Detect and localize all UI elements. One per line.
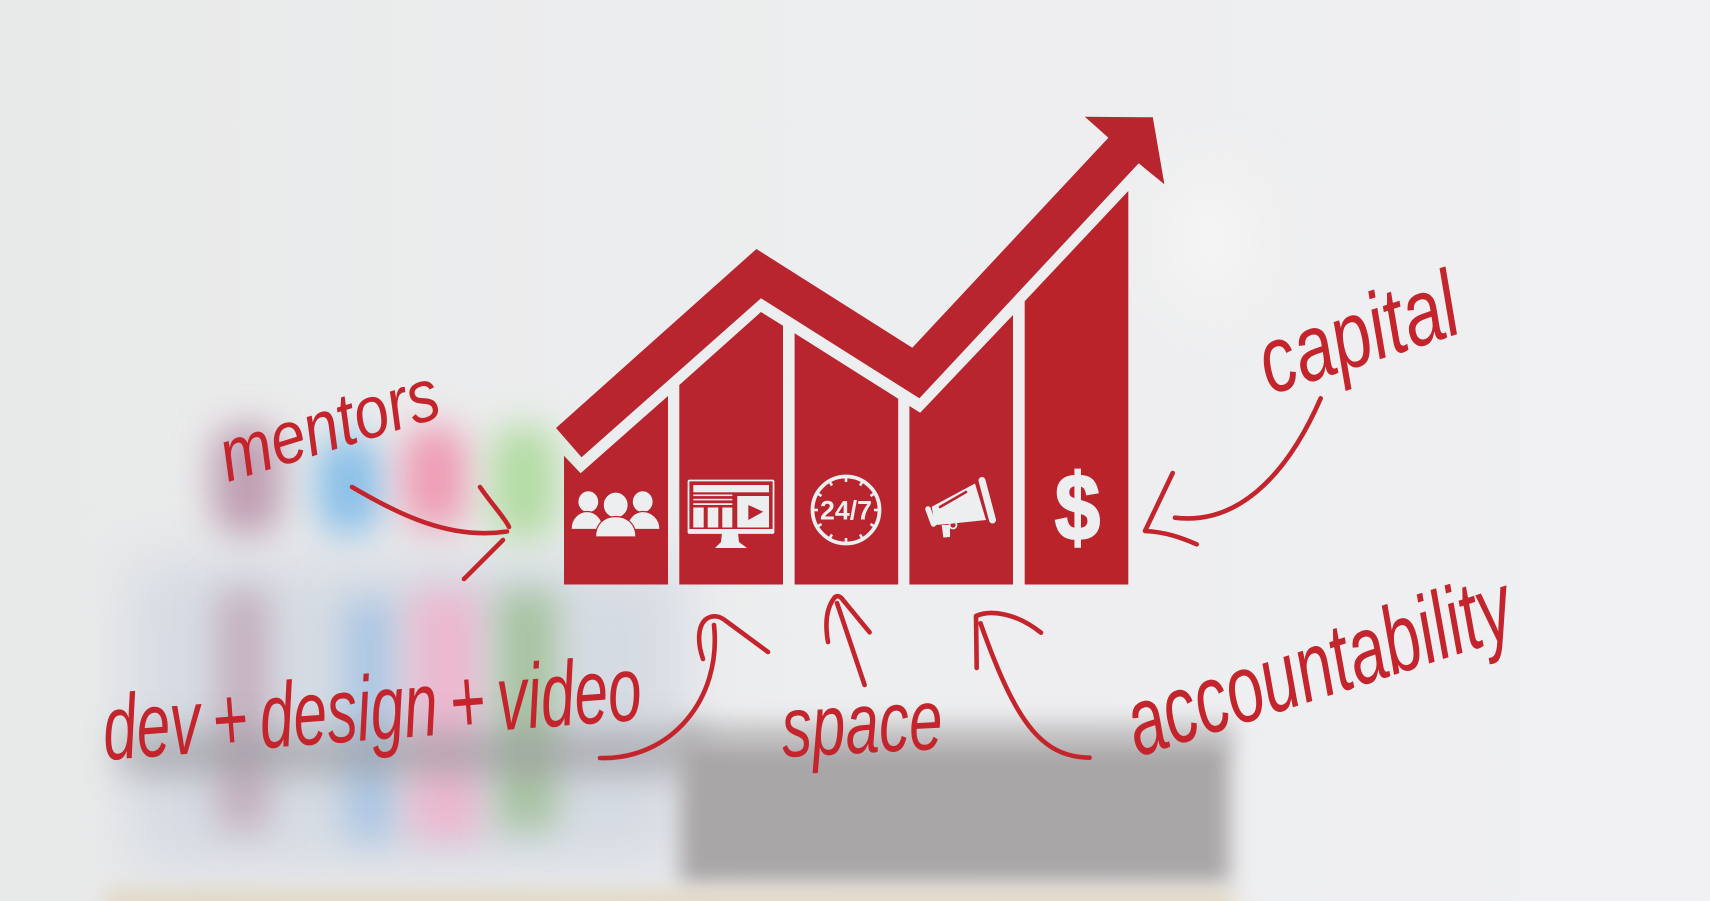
arrow: capital: [1145, 398, 1321, 544]
bar 4: accountability: [909, 315, 1013, 584]
icon: 24/7 clock: 24/7: [820, 496, 872, 526]
bar 1: mentors: [564, 396, 668, 584]
label: space: space: [779, 672, 945, 776]
icon: dollar sign: $: [1055, 454, 1100, 560]
bar 3: space: [795, 333, 898, 584]
icon: monitor with video: [688, 480, 774, 548]
arrow: dev + design + video: [600, 616, 768, 758]
icon: 24/7 clock: [812, 476, 880, 544]
growth arrow: [556, 117, 1164, 457]
label: mentors: mentors: [208, 352, 449, 497]
bar 5: capital: [1025, 191, 1128, 584]
icon: people: [571, 491, 660, 537]
label: dev + design + video: dev + design + video: [99, 638, 645, 780]
label: capital: capital: [1244, 250, 1473, 414]
icon: megaphone: [928, 480, 992, 538]
arrow: space: [826, 596, 870, 685]
arrow: accountability: [976, 613, 1090, 758]
arrow: mentors: [352, 487, 509, 579]
label: accountability: accountability: [1112, 552, 1529, 777]
chart: rising arrow and bars: [556, 117, 1164, 584]
bar 2: dev + design + video: [679, 312, 783, 584]
